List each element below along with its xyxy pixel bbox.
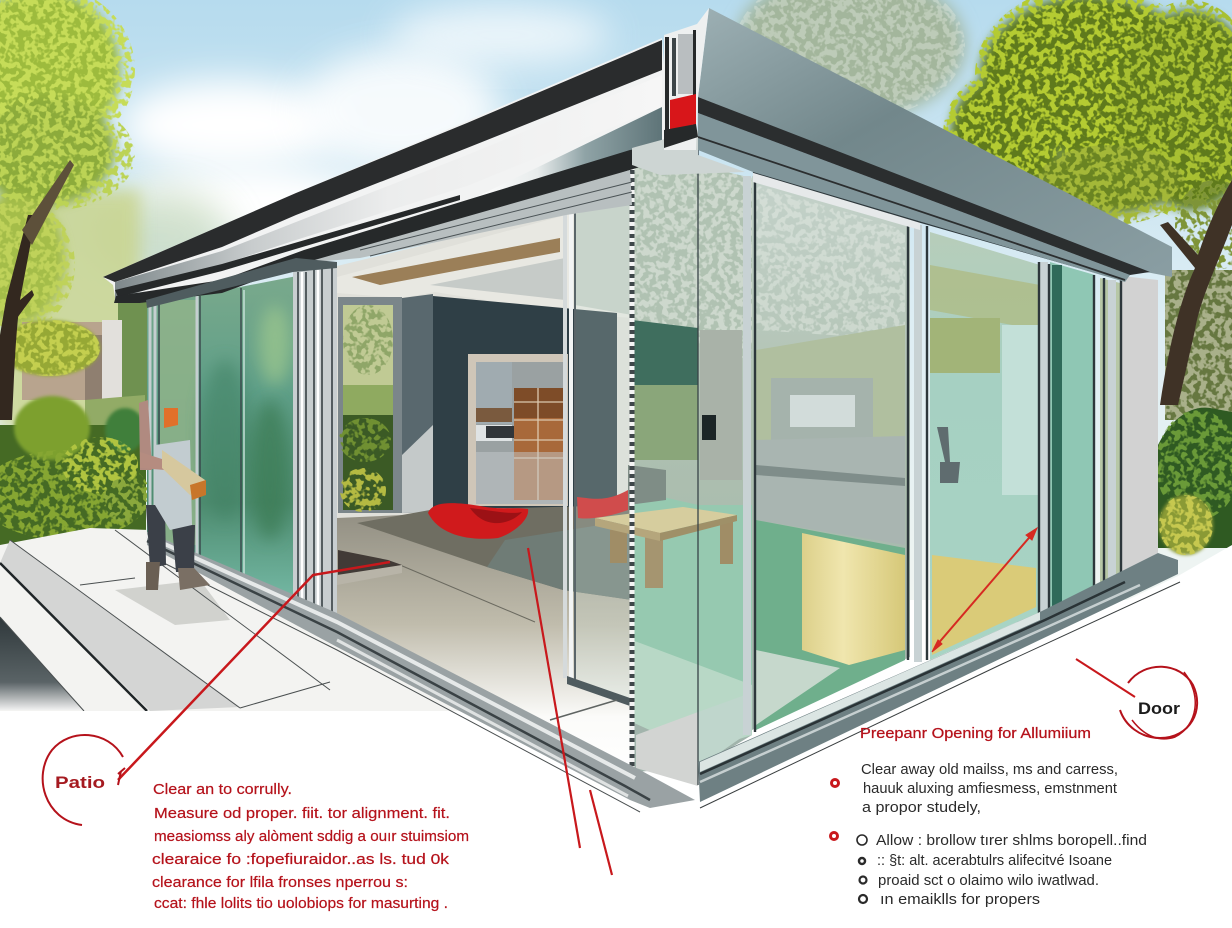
text block: allow list: Allow : brollow tırer shlms boropell..find (876, 833, 1147, 849)
window frames (747, 172, 1123, 735)
right glass panel (930, 232, 1040, 660)
interior room (337, 195, 632, 770)
threshold left (147, 532, 695, 812)
large right glass panel (752, 176, 910, 730)
text block: allow list: :: §t: alt. acerabtulrs alifecitvé Isoane (877, 853, 1112, 869)
white lower background (0, 545, 1232, 928)
patio pavement (0, 528, 460, 711)
text block: patio instructions (152, 781, 469, 912)
text block: patio instructions: clearaice fo :fopefiuraidor..as ls. tud 0k (152, 851, 450, 868)
red leader lines (118, 548, 612, 875)
left glass wall (147, 276, 297, 600)
text block: allow list: ın emaiklls for propers (880, 892, 1040, 908)
worker figure (139, 400, 210, 590)
side wall and back wall (402, 294, 617, 513)
left background trees and garden (0, 0, 150, 545)
sliding centre glass panel (550, 200, 632, 720)
corner glass panel (595, 150, 752, 786)
background: sky and clouds (0, 0, 1232, 600)
roof left fascia (103, 38, 668, 308)
text block: patio instructions: clearance for lfila fronses nperrou s: (152, 874, 408, 891)
building (103, 8, 1180, 812)
text block: allow list: proaid sct o olaimo wilo iwatlwad. (878, 873, 1099, 889)
right fascia (632, 97, 1150, 282)
red arrow: door (932, 528, 1037, 652)
window view (338, 297, 402, 513)
text block: clear away (861, 761, 1118, 816)
ceiling (337, 205, 632, 318)
heading: prepare opening: Preepanr Opening for Allumiium (860, 726, 1091, 742)
callout: Patio: Patio (55, 773, 105, 792)
coffee table (595, 507, 737, 588)
right background trees and shrubs (735, 0, 1232, 555)
threshold right (698, 553, 1180, 808)
roof (103, 8, 1172, 308)
corner post and red accent (664, 8, 709, 150)
callout: Door: Door (1138, 700, 1181, 718)
roof top (698, 8, 1172, 277)
dotted corner strip (630, 150, 634, 772)
text block: clear away: hauuk aluxing amfiesmess, emstnment (863, 780, 1118, 797)
far right glass and side wall (1050, 262, 1158, 616)
callout: Patio (43, 735, 125, 825)
bullets (830, 780, 867, 903)
floor (337, 505, 632, 770)
red chairs (428, 490, 628, 539)
text block: patio instructions: ccat: fhle lolits tio uolobiops for masurting . (154, 895, 448, 912)
text block: patio instructions: Clear an to corrully. (153, 781, 292, 798)
text block: clear away: Clear away old mailss, ms and carress, (861, 761, 1118, 778)
callout: Door (1076, 659, 1197, 739)
shelving cabinet (468, 354, 568, 506)
rug (357, 505, 632, 600)
door frame mullions (293, 266, 337, 618)
text block: allow list (876, 833, 1147, 908)
text block: patio instructions: Measure od proper. fiit. tor alignment. fit. (154, 805, 450, 822)
text block: patio instructions: measiomss aly alòment sddig a ouır stuimsiom (154, 828, 469, 845)
text block: clear away: a propor studely, (862, 799, 981, 816)
